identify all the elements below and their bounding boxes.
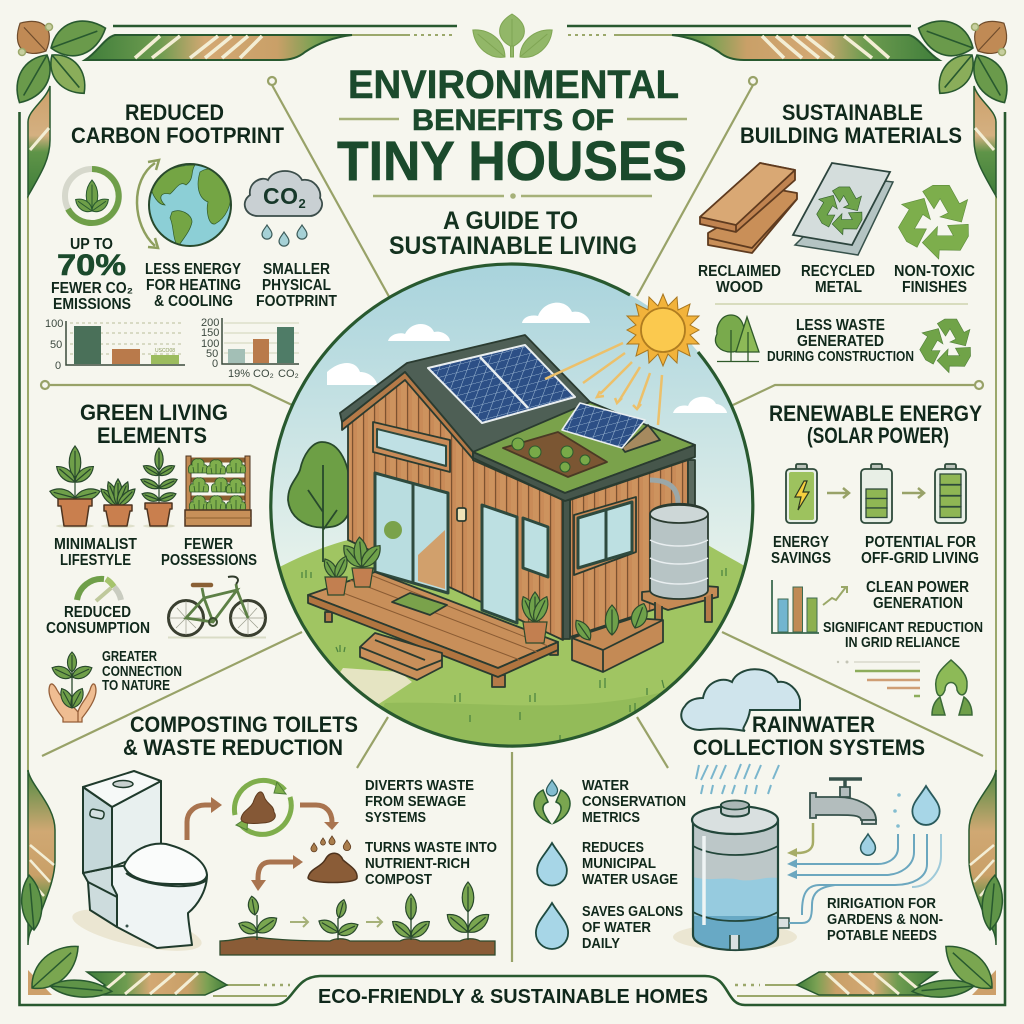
bar chart 1: 50 [50,339,62,351]
text: connection to nature: GREATER [102,649,157,665]
text: smaller physical footprint: SMALLER [263,261,330,278]
icon: vertical garden [185,456,251,526]
heading [71,100,285,148]
icon: 70% ring [65,169,119,223]
text: less waste: GENERATED [797,333,884,350]
text: diverts waste: DIVERTS WASTE [365,778,474,794]
title block: A GUIDE TO [443,207,578,235]
text: diverts waste: FROM SEWAGE [365,794,466,810]
icon: cloud [681,669,800,731]
text: water conservation [582,778,686,826]
label: reduced consumption [46,604,150,637]
icon: recycle [889,185,974,266]
arrowheads [787,848,797,879]
text: smaller physical footprint: PHYSICAL [262,277,331,294]
icon: water conservation hands [534,780,570,823]
icon: CO2 cloud: CO [263,183,298,209]
text: irrigation: RIRIGATION FOR [827,896,936,912]
heading: BUILDING MATERIALS [740,123,962,148]
bar chart 2: 150 [201,327,219,339]
heading: RENEWABLE ENERGY [769,401,982,426]
labels: materials: RECLAIMED [698,263,781,280]
title block: TINY HOUSES [337,129,687,192]
text: less energy [145,261,242,310]
text: irrigation: POTABLE NEEDS [827,928,937,944]
text: turns waste [365,840,497,888]
ground [280,540,744,707]
grass tufts [302,568,726,742]
title lines: ENVIRONMENTAL [348,63,679,107]
text: less energy: & COOLING [154,293,233,310]
icon: rain [696,764,779,794]
sky [270,264,754,584]
chart: energy bars [772,580,847,633]
heading [693,712,925,760]
steps [360,633,442,680]
text: diverts waste: SYSTEMS [365,810,426,826]
text: saves gallons: OF WATER [582,920,651,936]
labels: materials: FINISHES [902,279,967,296]
icon: trees [715,315,759,362]
panel: green living elements [46,400,266,722]
corner: top left leaves and band [7,12,352,196]
heading: CARBON FOOTPRINT [71,123,285,148]
icon: cycling arrows [137,160,159,248]
icon: faucet drop [861,834,875,855]
green roof [473,402,695,493]
bar chart 2: CO₂ [278,368,299,380]
text: municipal usage [582,840,678,888]
label: reduced consumption: REDUCED [64,604,131,621]
panel: sustainable building materials [698,100,975,378]
text: connection to nature [102,649,182,694]
heading: COLLECTION SYSTEMS [693,735,925,760]
text: water conservation: CONSERVATION [582,794,686,810]
labels: energy savings and off-grid: OFF-GRID LIVING [861,550,979,567]
icon: recycled metal [793,163,893,255]
icon: reclaimed wood [700,163,797,253]
labels: energy savings and off-grid: ENERGY [773,534,830,551]
clouds [327,303,727,413]
bar chart 2: 100 [201,338,219,350]
labels: materials: RECYCLED [801,263,875,280]
text: water conservation: METRICS [582,810,640,826]
icon: recycle small [913,319,974,378]
bar chart 1: USCO08 [155,348,175,354]
planter [572,618,663,672]
text: clean power and grid reliance: IN GRID RELIANCE [845,635,960,651]
text: connection to nature: TO NATURE [102,678,170,694]
icons: seedlings in soil [220,882,495,955]
labels: materials [698,263,975,296]
labels: lifestyle: MINIMALIST [54,536,137,553]
text: clean power and grid reliance: CLEAN POWER [866,579,969,596]
labels: materials: METAL [815,279,862,296]
panel: central house illustration [270,264,760,760]
heading [123,712,358,760]
icon: sprout arch [932,660,972,715]
bar chart 2: 50 [206,348,218,360]
icon: globe [149,164,231,247]
icon: water tank [673,800,797,960]
text: turns waste: COMPOST [365,872,432,888]
icon: consumption gauge [77,579,121,601]
heading: & WASTE REDUCTION [123,735,343,760]
bar chart 1: 0 [55,360,61,372]
heading: GREEN LIVING [80,400,228,425]
icons: potted plants [48,446,179,528]
corner: bottom right leaves and band [797,770,1005,1000]
text: municipal usage: REDUCES [582,840,644,856]
panel: renewable energy [769,401,983,715]
heading [769,401,982,448]
text: less waste [767,317,914,365]
text: municipal usage: WATER USAGE [582,872,678,888]
text: saves gallons: SAVES GALONS [582,904,683,920]
potted plants [321,537,651,643]
label: reduced consumption: CONSUMPTION [46,620,150,637]
labels: lifestyle [54,536,257,569]
footer text: ECO-FRIENDLY & SUSTAINABLE HOMES [318,986,708,1008]
icon: drop [537,843,567,885]
icon: CO2 cloud: 2 [298,196,306,211]
heading: RAINWATER [752,712,875,737]
heading: ELEMENTS [97,423,207,448]
rain barrel [650,480,678,503]
icon: compost cycle [234,780,291,834]
heading: SUSTAINABLE [782,100,923,125]
door mat [392,593,447,615]
text: irrigation: GARDENS & NON- [827,912,943,928]
bar chart 1: 100 [45,318,63,330]
icon: title sprig [467,14,558,64]
bar chart 2: 200 [201,317,219,329]
bar chart 2: CO₂ [253,368,274,380]
text: clean power and grid reliance: SIGNIFICANT REDUCTION [823,620,983,636]
stat: 70% fewer: UP TO [70,236,113,253]
bar chart 2: 0 [212,358,218,370]
title block [337,14,687,260]
solar panels [428,345,575,423]
labels: materials: WOOD [716,279,763,296]
tree [288,442,351,562]
panel: reduced carbon footprint [45,100,337,380]
icon: sun with rays [545,294,699,425]
title block: SUSTAINABLE LIVING [389,232,637,260]
bar chart 1 [45,318,185,372]
text: smaller physical footprint [256,261,337,310]
heading [80,400,228,448]
text: smaller physical footprint: FOOTPRINT [256,293,337,310]
corner: bottom left leaves and band [19,770,227,1000]
bar chart 2: 19% [228,368,250,380]
deck [325,612,558,687]
text: clean power and grid reliance: GENERATION [873,595,963,612]
corner: top right leaves and band [672,12,1017,196]
text: irrigation [827,896,943,944]
text: turns waste: TURNS WASTE INTO [365,840,497,856]
icon: toilet [69,771,207,959]
text: less energy: FOR HEATING [146,277,241,294]
house walls [308,335,718,687]
title block: BENEFITS OF [412,104,614,137]
panel: composting toilets [69,712,497,959]
labels: energy savings and off-grid [771,534,979,567]
stat: 70% fewer [51,236,133,313]
labels: energy savings and off-grid: SAVINGS [771,550,831,567]
text: diverts waste [365,778,474,826]
icon: faucet [810,779,876,824]
labels: lifestyle: POSSESSIONS [161,552,257,569]
labels: lifestyle: FEWER [184,536,233,553]
icon: large drop [912,786,940,825]
panel: rainwater collection [534,669,943,960]
icon: compost pile [308,836,357,882]
text: water conservation: WATER [582,778,629,794]
text: clean power and grid reliance [823,579,983,651]
stat: 70% fewer: FEWER CO₂ [51,280,133,297]
text: saves gallons [582,904,683,952]
text: turns waste: NUTRIENT-RICH [365,856,470,872]
text: less energy: LESS ENERGY [145,261,242,278]
icon: hands with sprout [49,652,96,722]
pointer lines [41,77,983,962]
text: saves gallons: DAILY [582,936,620,952]
arrows: composting flow [187,805,332,882]
stat: 70% fewer: 70% [57,249,126,282]
stat: 70% fewer: EMISSIONS [53,296,131,313]
icons: batteries [786,464,966,523]
icon: drop [536,903,568,949]
heading: REDUCED [125,100,224,125]
pipes and arrows [789,793,941,923]
mini lines [837,660,920,696]
roof [340,335,590,458]
labels: materials: NON-TOXIC [894,263,975,280]
heading: (SOLAR POWER) [807,423,949,448]
text: less waste: DURING CONSTRUCTION [767,349,914,365]
bar chart 2 [201,317,299,380]
heading [740,100,962,148]
icon: CO2 cloud [245,171,322,246]
text: municipal usage: MUNICIPAL [582,856,656,872]
text: connection to nature: CONNECTION [102,664,182,680]
text: less waste: LESS WASTE [796,317,885,334]
rooftop solar panel [622,425,660,452]
arrowheads [211,797,339,891]
circle outline [271,264,753,746]
icon: bicycle [168,577,266,638]
labels: lifestyle: LIFESTYLE [60,552,131,569]
labels: energy savings and off-grid: POTENTIAL FOR [865,534,976,551]
windows [373,422,450,472]
heading: COMPOSTING TOILETS [130,712,358,737]
